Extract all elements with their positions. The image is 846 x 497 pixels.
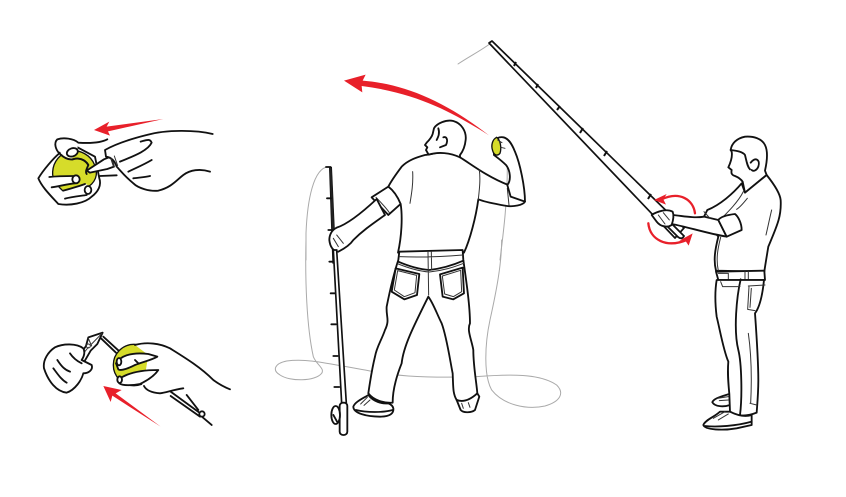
jeans bbox=[715, 280, 764, 416]
icon: yellow ball in hand bbox=[492, 137, 501, 155]
belt bbox=[398, 261, 463, 270]
belt bbox=[716, 271, 765, 280]
side pocket bbox=[748, 285, 765, 311]
rod guides bbox=[514, 62, 651, 199]
head bbox=[728, 137, 767, 193]
arrow: throw arc bbox=[344, 75, 489, 135]
torso and shirt bbox=[372, 152, 525, 253]
right arm raised bbox=[493, 137, 525, 202]
rod lower section and reel bbox=[329, 250, 347, 435]
arrow: pull direction bbox=[103, 386, 161, 427]
left fingers bbox=[41, 175, 117, 199]
fishing line tip bbox=[458, 43, 491, 64]
tool and right hand bbox=[87, 131, 213, 191]
figure: right man legs bbox=[703, 279, 765, 430]
fishing line loose around centre figure bbox=[306, 167, 507, 260]
pliers bbox=[77, 333, 103, 363]
rod bbox=[489, 41, 684, 238]
icon: yellow ball bbox=[53, 151, 96, 191]
left thumb bbox=[55, 138, 107, 165]
icon: yellow ball bbox=[113, 344, 155, 386]
rod grip bbox=[660, 219, 684, 238]
figure: centre man, lower body bbox=[329, 250, 479, 435]
right shoe bbox=[457, 393, 479, 412]
lower finger bbox=[119, 370, 158, 385]
left fist bbox=[44, 344, 92, 393]
figure: right man upper body bbox=[648, 137, 781, 280]
hand on grip bbox=[652, 210, 673, 227]
illustration: pliers pulling wire through ball bbox=[44, 333, 231, 427]
rod top section bbox=[326, 167, 336, 263]
left hand palm bbox=[38, 143, 100, 205]
arrow: push direction left bbox=[94, 119, 163, 136]
figure: centre man throwing ball, upper body bbox=[326, 75, 525, 263]
front shoe bbox=[703, 412, 752, 430]
illustration: hands pushing tool through ball bbox=[38, 119, 213, 205]
torso and shirt bbox=[704, 175, 781, 272]
right hand on ball bbox=[116, 343, 231, 393]
head bbox=[425, 121, 466, 157]
upper rear shoe bbox=[712, 394, 730, 406]
left arm gripping rod bbox=[329, 199, 385, 252]
upper finger bbox=[116, 353, 157, 370]
figure: right man casting, rod extended bbox=[458, 41, 684, 238]
arm and sleeve bbox=[672, 215, 727, 237]
jeans bbox=[368, 250, 477, 403]
rod wire through ball bbox=[101, 337, 212, 425]
arrows: rotate reel grip bbox=[648, 194, 695, 246]
back pockets bbox=[392, 268, 464, 299]
left shoe bbox=[353, 395, 393, 417]
